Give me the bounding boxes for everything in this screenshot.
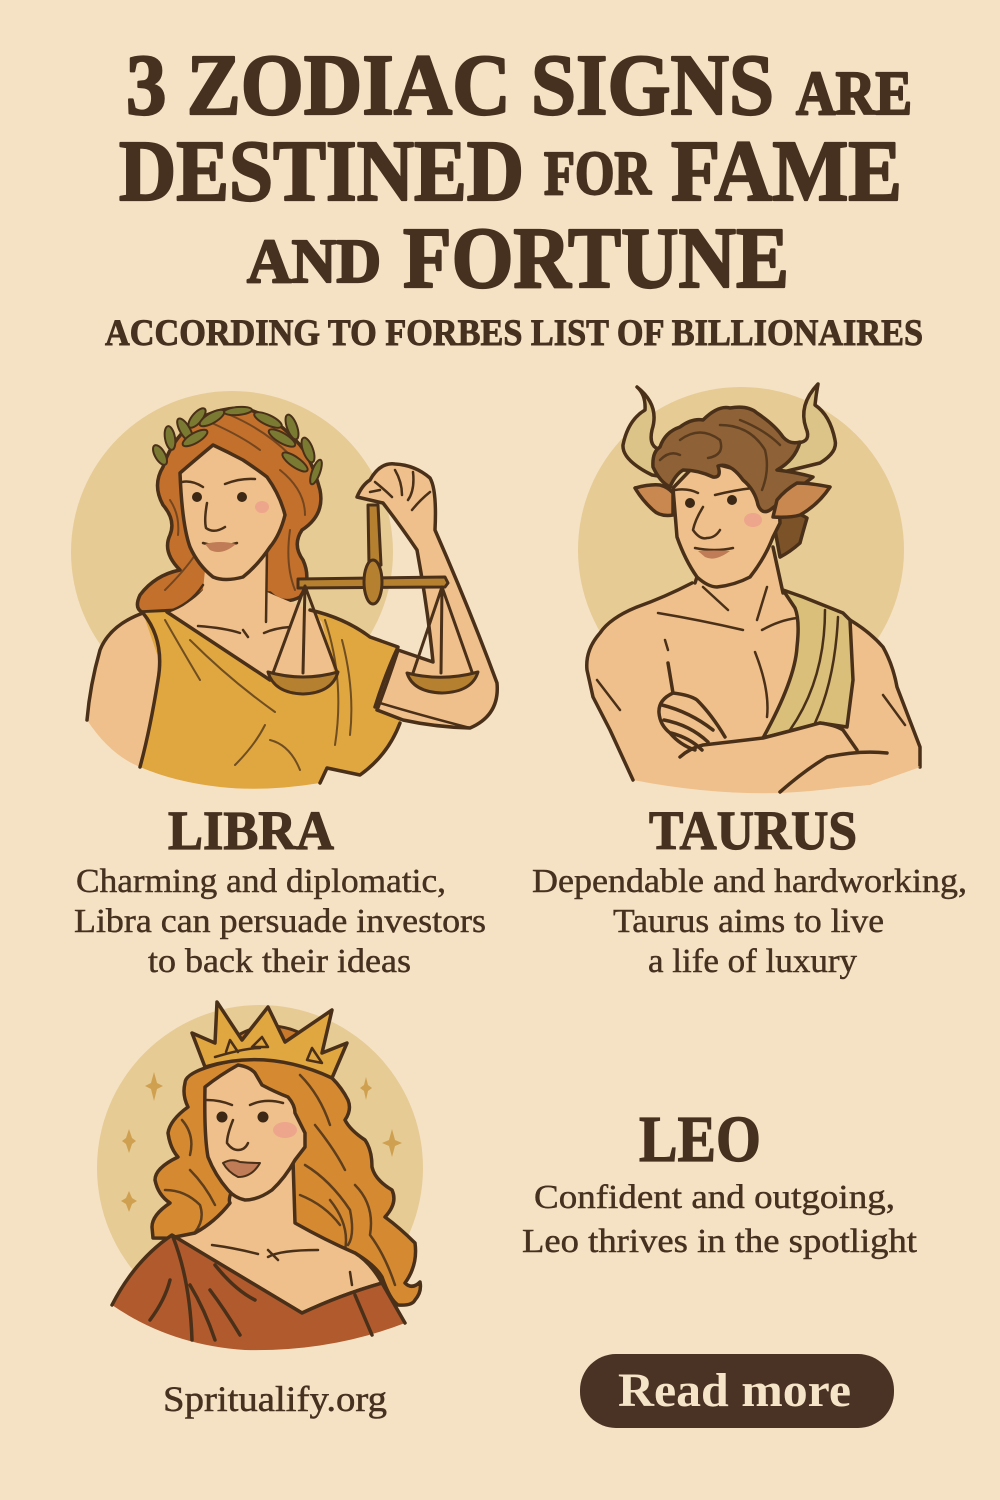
Taurus left ear	[635, 485, 673, 515]
Libra raised arm and hand	[357, 464, 497, 728]
Leo hair	[152, 1059, 420, 1305]
Leo sparkles	[121, 1072, 402, 1212]
title: 3 ZODIAC SIGNS	[126, 36, 774, 133]
Taurus face	[673, 460, 780, 587]
Leo name: LEO	[639, 1103, 761, 1176]
Libra description: to back their ideas	[148, 943, 411, 980]
title: AND	[247, 228, 381, 296]
title	[119, 36, 912, 306]
Taurus left horn	[623, 387, 670, 478]
title: FAME	[671, 122, 902, 219]
Taurus name: TAURUS	[649, 800, 857, 861]
Leo crown	[192, 1002, 347, 1078]
Taurus description	[532, 863, 967, 980]
title: FORTUNE	[403, 209, 789, 306]
Taurus crossed arms	[658, 663, 920, 793]
title: ARE	[796, 60, 912, 128]
website credit: Spritualify.org	[163, 1379, 387, 1419]
Libra description: Libra can persuade investors	[74, 903, 486, 940]
subtitle: ACCORDING TO FORBES LIST OF BILLIONAIRES	[105, 313, 923, 354]
Libra dress	[140, 610, 400, 789]
Leo face	[205, 1065, 305, 1200]
Libra neck and chest	[167, 545, 336, 680]
Leo neck and chest	[175, 1160, 382, 1313]
Leo hair dome behind crown	[235, 1026, 308, 1060]
Leo dress	[112, 1235, 405, 1350]
Taurus description: Dependable and hardworking,	[532, 863, 967, 900]
Taurus back hair	[775, 500, 807, 557]
Taurus hair	[653, 407, 813, 512]
read more button	[580, 1354, 894, 1428]
Libra description: Charming and diplomatic,	[76, 863, 446, 900]
Taurus sash	[763, 590, 853, 738]
Taurus description: a life of luxury	[648, 943, 857, 980]
illustration: Leo	[97, 1002, 423, 1350]
Libra name: LIBRA	[168, 800, 334, 861]
read more button: Read more	[618, 1364, 851, 1417]
illustration: Taurus	[578, 384, 920, 793]
Libra laurel wreath	[150, 406, 324, 486]
Libra scales	[268, 505, 478, 694]
Taurus right horn	[775, 384, 835, 474]
title: DESTINED	[119, 122, 524, 219]
Libra left arm	[87, 613, 158, 767]
Taurus right ear	[773, 483, 830, 517]
title: FOR	[544, 140, 652, 208]
illustration: Libra	[71, 391, 497, 789]
Libra hair	[137, 408, 321, 612]
Taurus torso	[587, 547, 920, 793]
Libra face	[180, 445, 285, 580]
Taurus description: Taurus aims to live	[613, 903, 884, 940]
Leo description	[522, 1179, 918, 1260]
Leo description: Leo thrives in the spotlight	[522, 1223, 918, 1260]
Leo description: Confident and outgoing,	[534, 1179, 895, 1216]
Libra description	[74, 863, 486, 980]
